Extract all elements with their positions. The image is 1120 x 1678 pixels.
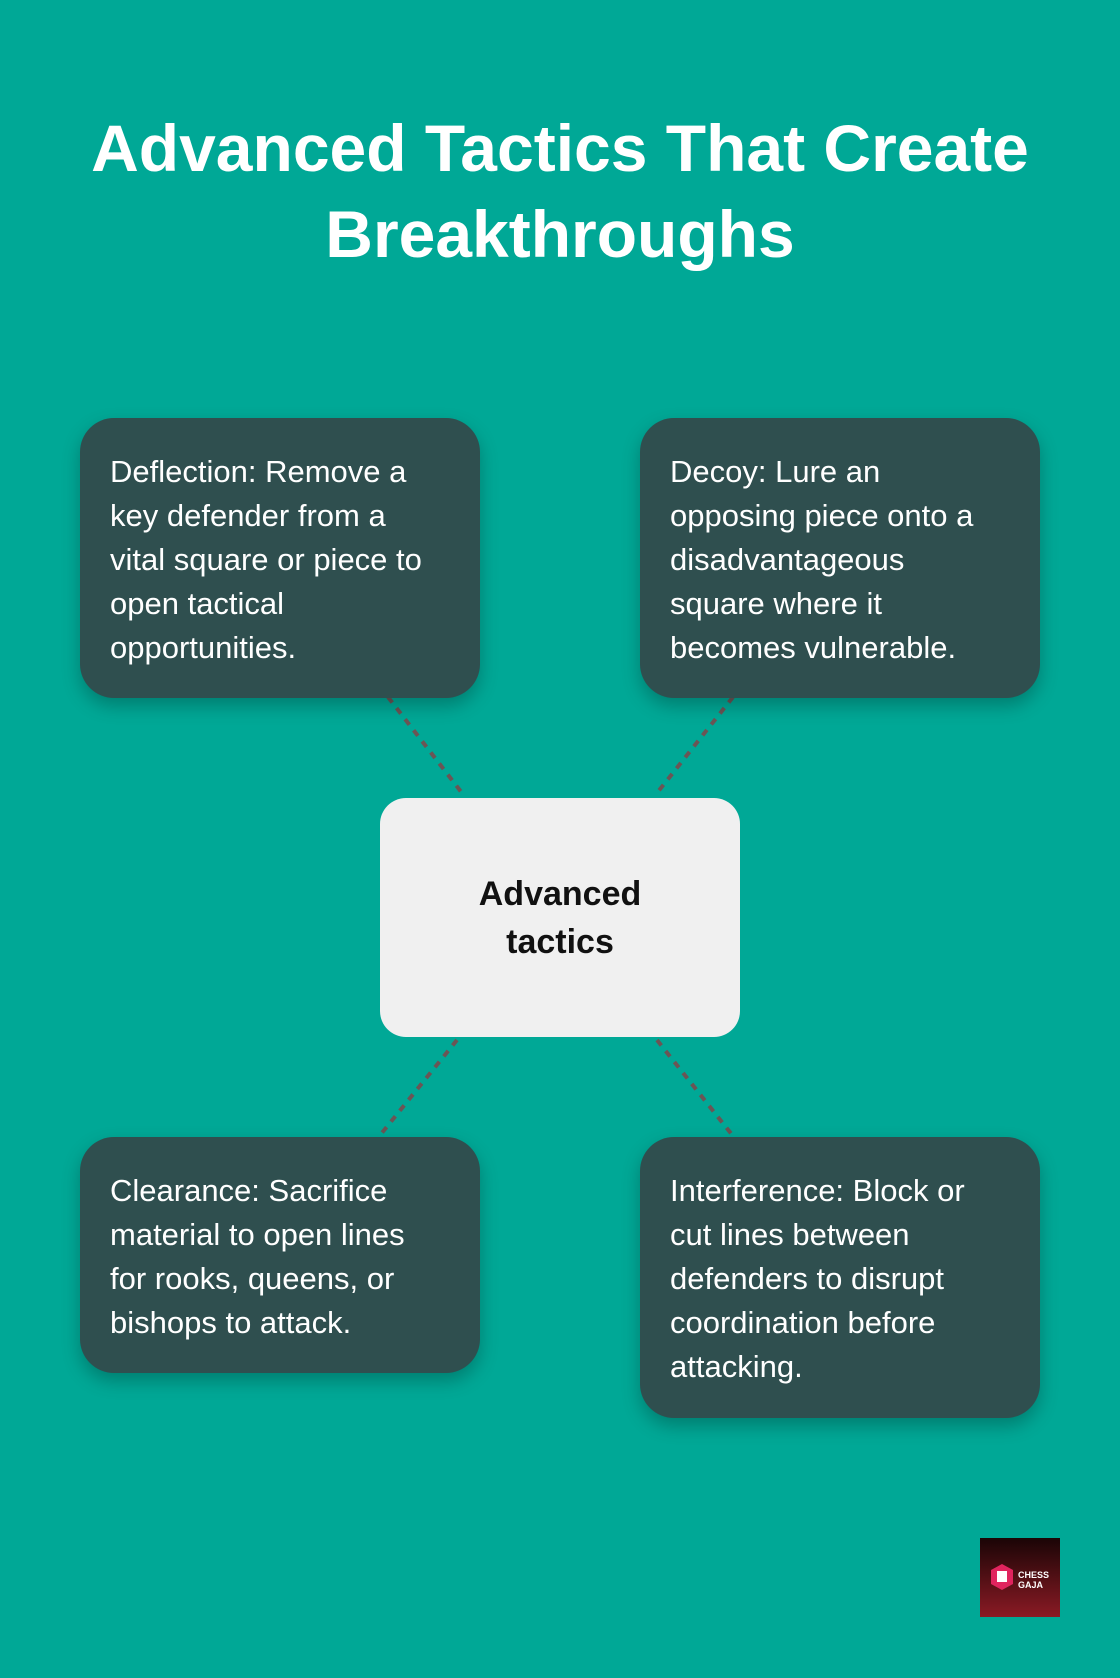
title [91,111,1029,271]
panel: deflection: Deflection: Remove a [110,454,406,489]
panel: deflection: key defender from a [110,498,386,533]
logo [980,1538,1060,1617]
panel: interference: defenders to disrupt [670,1261,944,1296]
panel: deflection [80,418,480,698]
panel: clearance: for rooks, queens, or [110,1261,394,1296]
panel: decoy [640,418,1040,698]
panel: decoy: disadvantageous [670,542,904,577]
title: Breakthroughs [325,197,795,271]
panel: interference: attacking. [670,1349,803,1384]
panel: decoy: Decoy: Lure an [670,454,880,489]
central node: Advanced [479,874,641,912]
panel: interference: coordination before [670,1305,935,1340]
icon: hexagon elephant: CHESS [1018,1570,1049,1580]
panel: deflection: open tactical [110,586,284,621]
icon: hexagon elephant: GAJA [1018,1580,1044,1590]
icon: hexagon elephant [991,1564,1049,1590]
panel: clearance: bishops to attack. [110,1305,351,1340]
panel: decoy: becomes vulnerable. [670,630,956,665]
panel: clearance: Clearance: Sacrifice [110,1173,387,1208]
panel: decoy: square where it [670,586,882,621]
central node [380,798,740,1037]
panel: deflection: vital square or piece to [110,542,422,577]
title: Advanced Tactics That Create [91,111,1029,185]
panel: decoy: opposing piece onto a [670,498,973,533]
panel: clearance: material to open lines [110,1217,405,1252]
panel: clearance [80,1137,480,1373]
central node: tactics [506,922,614,960]
panel: interference: Interference: Block or [670,1173,965,1208]
panel: interference: cut lines between [670,1217,910,1252]
panel: interference [640,1137,1040,1418]
panel: deflection: opportunities. [110,630,296,665]
